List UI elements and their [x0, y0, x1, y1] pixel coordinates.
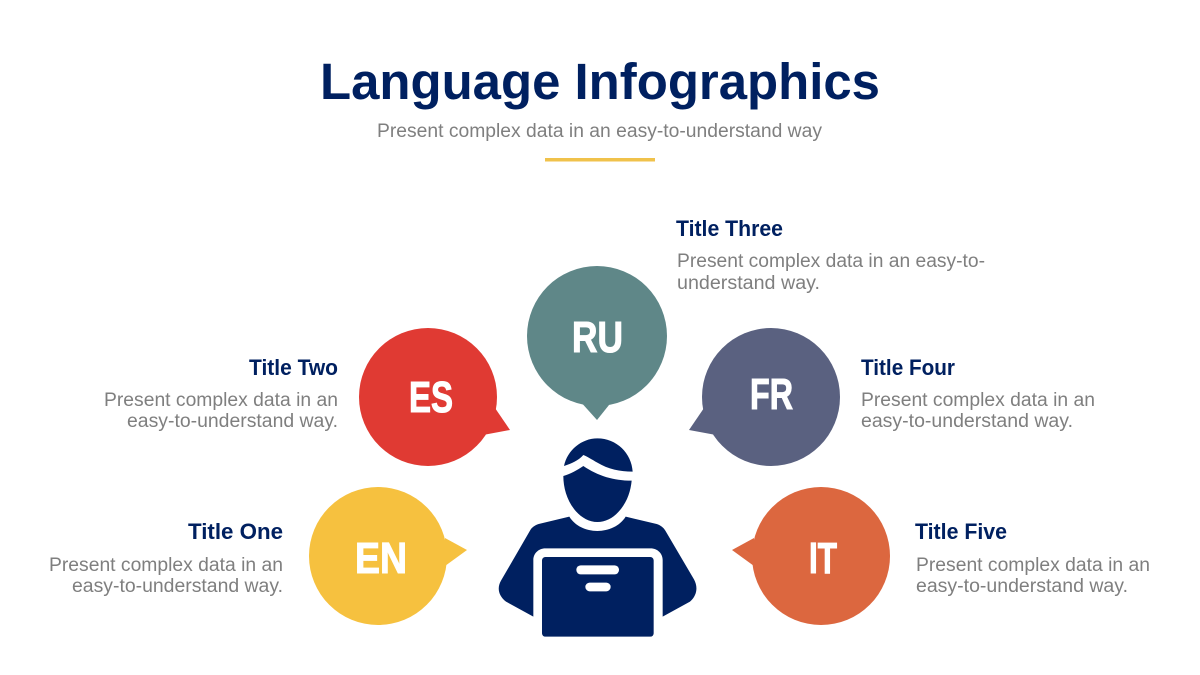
text: title five: Title Five	[915, 519, 1007, 544]
speech bubble: IT: IT	[809, 534, 837, 583]
subtitle: Present complex data in an easy-to-understand way	[377, 121, 822, 142]
text: title three	[676, 216, 985, 294]
panel: title three	[527, 216, 985, 420]
text: title four: Present complex data in an	[861, 390, 1095, 411]
speech bubble: EN	[309, 487, 467, 625]
text: title three: Present complex data in an easy-to-	[677, 251, 985, 272]
speech bubble: ES	[359, 328, 510, 466]
panel: title four	[689, 328, 1095, 466]
text: title three: Title Three	[676, 216, 783, 241]
text: title two	[104, 355, 338, 432]
text: title five	[915, 519, 1150, 597]
panel: title one	[49, 487, 467, 625]
text: title four: easy-to-understand way.	[861, 411, 1073, 432]
speech bubble: RU: RU	[572, 313, 623, 362]
speech bubble: RU	[527, 266, 667, 420]
text: title five: easy-to-understand way.	[916, 576, 1128, 597]
text: title four	[861, 355, 1095, 432]
panel: title five	[732, 487, 1150, 625]
text: title one	[49, 519, 283, 597]
text: title five: Present complex data in an	[916, 555, 1150, 576]
text: title two: Present complex data in an	[104, 390, 338, 411]
speech bubble: ES: ES	[409, 373, 453, 422]
speech bubble: FR: FR	[750, 370, 793, 419]
text: title two: easy-to-understand way.	[127, 411, 338, 432]
text: title two: Title Two	[249, 355, 338, 380]
text: title one: Title One	[188, 519, 283, 544]
text: title one: Present complex data in an	[49, 555, 283, 576]
accent underline	[545, 158, 655, 162]
speech bubble: EN: EN	[355, 534, 407, 583]
speech bubble: FR	[689, 328, 840, 466]
text: title three: understand way.	[677, 273, 820, 294]
panel: title two	[104, 328, 510, 466]
speech bubble: IT	[732, 487, 890, 625]
text: title one: easy-to-understand way.	[72, 576, 283, 597]
icon: person at laptop	[499, 438, 696, 637]
text: title four: Title Four	[861, 355, 955, 380]
title: Language Infographics	[320, 53, 880, 110]
